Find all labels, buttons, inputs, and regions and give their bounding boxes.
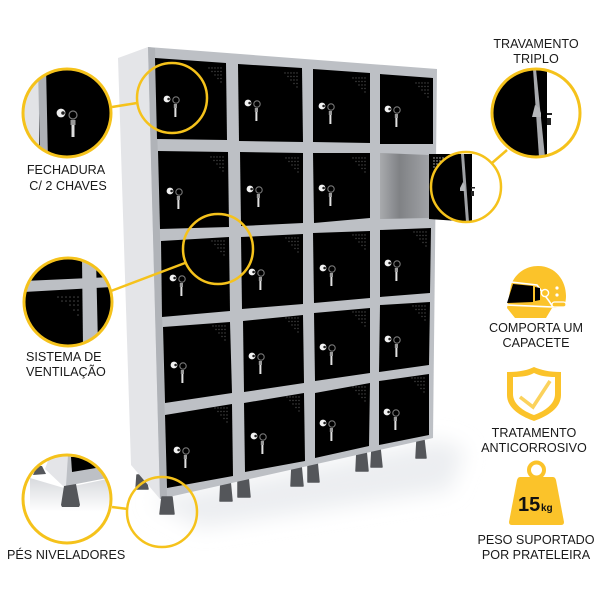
front frame: [148, 47, 437, 499]
icon: shield: [507, 367, 561, 421]
label: travamento: TRIPLO: [513, 52, 559, 66]
callout: ventilacao: [24, 214, 253, 346]
feet: [136, 440, 426, 501]
label: anticorrosivo: ANTICORROSIVO: [481, 441, 587, 455]
label: anticorrosivo: TRATAMENTO: [492, 426, 576, 440]
floor shadow: [150, 440, 465, 528]
callout: fechadura: [20, 63, 207, 161]
vent holes: [208, 67, 429, 423]
doors: [155, 58, 433, 488]
side panel: [118, 47, 160, 499]
front foot: [160, 497, 174, 514]
weight value: 15: [518, 494, 540, 516]
pes cabinet ring: [127, 477, 197, 547]
label: capacete: COMPORTA UM: [489, 321, 583, 335]
label: travamento: TRAVAMENTO: [493, 37, 579, 51]
icon: helmet: [507, 266, 566, 318]
travamento inset circle: [494, 70, 552, 156]
travamento cabinet ring: [431, 152, 501, 222]
callout: travamento: [431, 69, 580, 222]
label: fechadura: C/ 2 CHAVES: [29, 179, 107, 193]
open compartment: [380, 153, 429, 219]
label: capacete: CAPACETE: [503, 336, 569, 350]
ventilacao cabinet ring: [183, 214, 253, 284]
open door: [429, 154, 475, 222]
label: fechadura: FECHADURA: [27, 163, 105, 177]
fechadura inset circle: [24, 70, 110, 156]
fechadura cabinet ring: [137, 63, 207, 133]
label: ventilacao: VENTILAÇÃO: [26, 365, 106, 379]
pes inset circle: [30, 456, 110, 507]
locker cabinet: [118, 47, 475, 514]
label: ventilacao: SISTEMA DE: [26, 350, 102, 364]
label: peso: POR PRATELEIRA: [482, 548, 591, 562]
weight value: kg: [541, 503, 553, 514]
label: peso: PESO SUPORTADO: [477, 533, 595, 547]
ventilacao inset circle: [24, 258, 112, 346]
callout: pes niveladores: [23, 455, 197, 547]
label: pes niveladores: PÉS NIVELADORES: [7, 547, 125, 562]
locks and keys: [164, 96, 400, 468]
icon: weight 15kg: [509, 462, 564, 525]
